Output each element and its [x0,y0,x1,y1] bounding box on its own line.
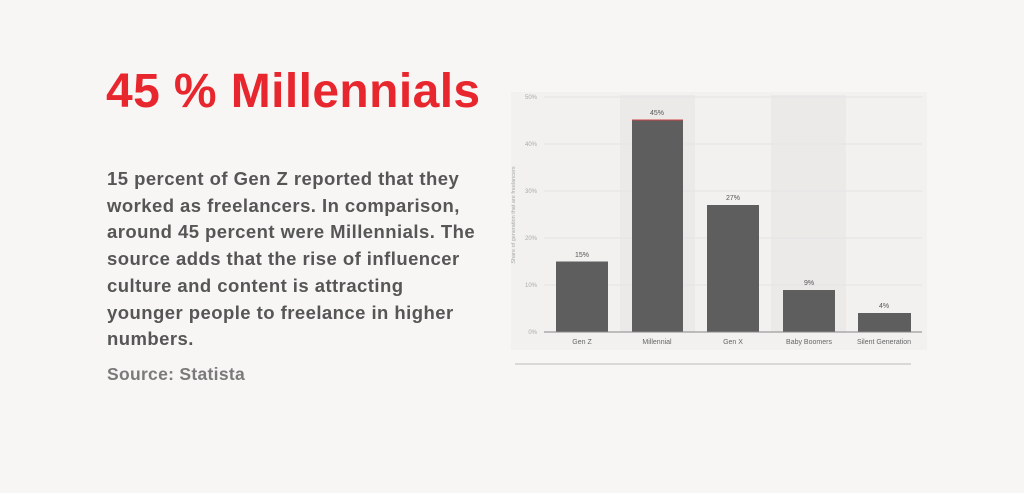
body text: around 45 percent were Millennials. The [107,221,475,242]
body text [107,168,475,349]
title: 45 % Millennials [106,65,481,118]
bar chart: 15% [575,252,589,259]
bar chart: 45% [650,110,664,117]
bar chart: 27% [726,195,740,202]
bar chart: 0% [528,330,538,336]
body text: younger people to freelance in higher [107,302,454,323]
body text: culture and content is attracting [107,275,404,296]
bar chart: 10% [525,283,538,289]
bar chart: Baby Boomers [786,339,832,346]
bar chart: 4% [879,303,889,310]
bar chart: Gen X [723,339,743,346]
bar chart: Share of generation that are freelancers [511,166,517,264]
body text: numbers. [107,328,194,349]
body text: source adds that the rise of influencer [107,248,460,269]
bar chart: 20% [525,236,538,242]
bar chart: Millennial [642,339,672,346]
source: Source: Statista [107,364,245,384]
bar chart: 9% [804,280,814,287]
body text: worked as freelancers. In comparison, [107,195,460,216]
bar chart: Gen Z [572,339,592,346]
bar chart: 30% [525,189,538,195]
bar chart: 40% [525,142,538,148]
bar chart: Silent Generation [857,339,911,346]
body text: 15 percent of Gen Z reported that they [107,168,459,189]
bar chart: 50% [525,95,538,101]
